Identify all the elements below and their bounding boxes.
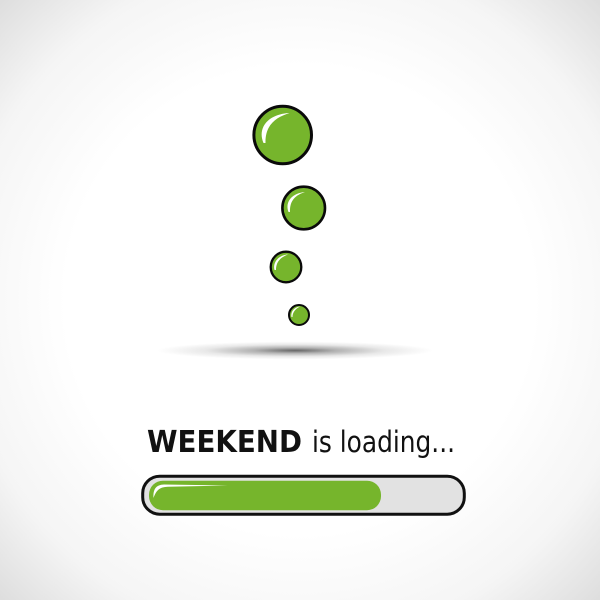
floor shadow bbox=[157, 342, 433, 360]
heading: weekend is loading bbox=[147, 425, 455, 460]
progress bar bbox=[143, 476, 464, 514]
bubble: small bbox=[289, 305, 309, 325]
heading: weekend is loading: is loading... bbox=[312, 425, 455, 459]
bar fill bbox=[149, 481, 381, 510]
bar highlight bbox=[153, 484, 228, 498]
bubble: second bbox=[282, 187, 325, 229]
heading: weekend is loading: WEEKEND bbox=[147, 425, 302, 460]
bubble: large bbox=[254, 106, 312, 164]
bubble: third bbox=[271, 252, 301, 282]
bar track bbox=[143, 476, 464, 514]
